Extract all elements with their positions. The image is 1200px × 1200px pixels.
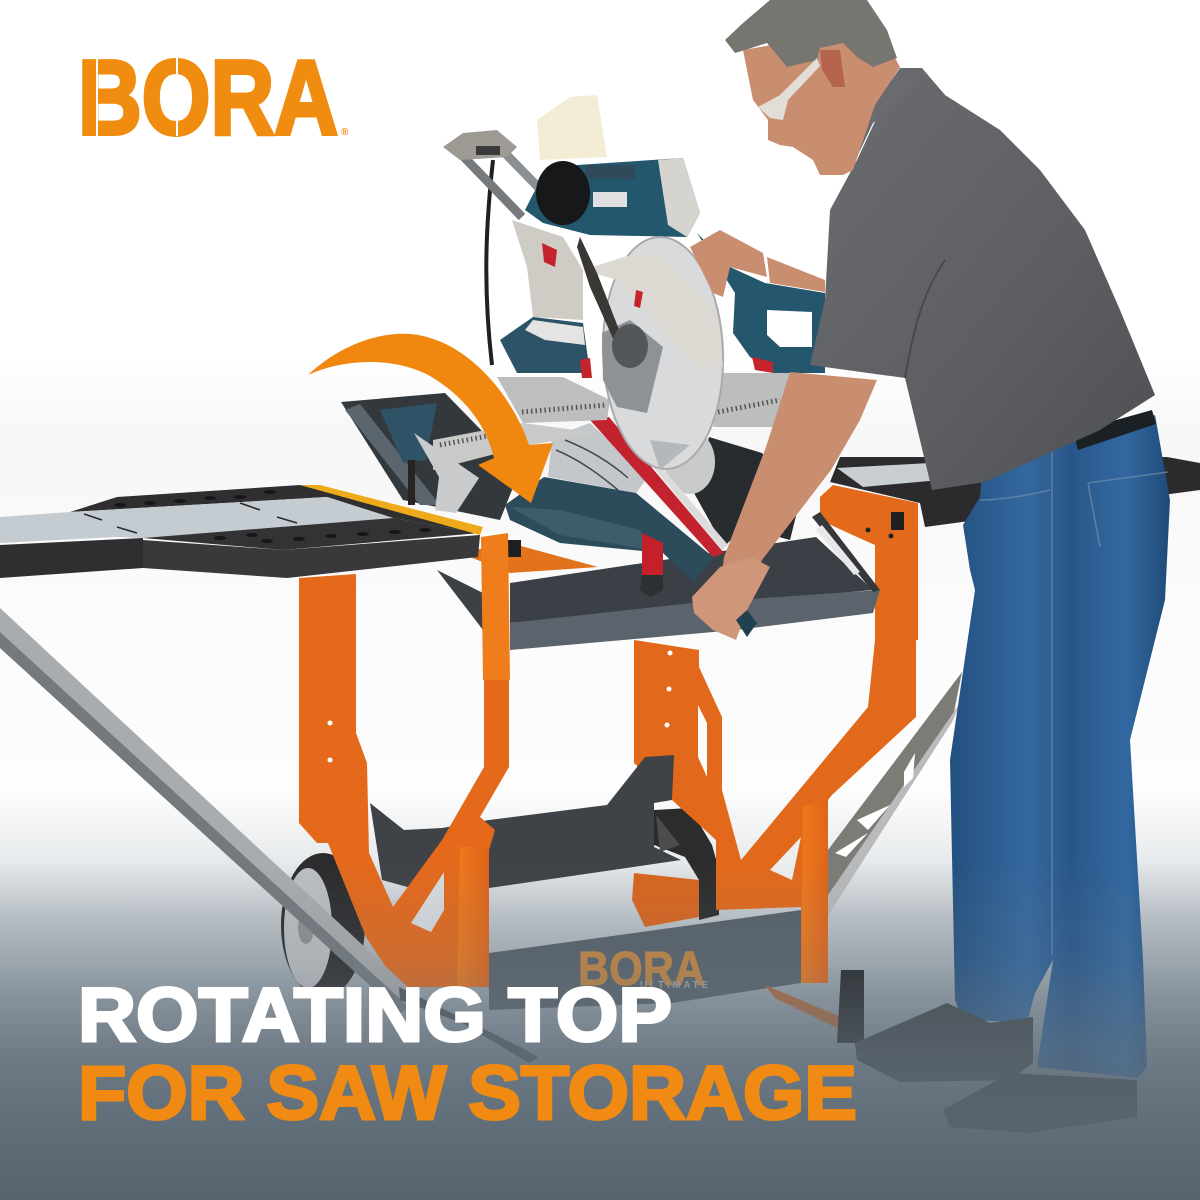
- headline: FOR SAW STORAGE: [78, 1051, 857, 1136]
- front rail with logo: ULTIMATE: [640, 980, 708, 991]
- orange crossmember under saw: [460, 543, 598, 573]
- man: front arm and hand: [692, 372, 877, 640]
- overlay fading the lower scene into the gradient: [0, 860, 1200, 1200]
- headline: [78, 973, 857, 1136]
- man: polo shirt: [810, 68, 1155, 490]
- orange rotation arrow: [308, 334, 553, 503]
- headline: ROTATING TOP: [78, 973, 672, 1058]
- motor housing: [525, 158, 700, 237]
- right table wing: [830, 457, 1200, 527]
- man: head: [725, 0, 900, 175]
- left orange frame: [299, 574, 509, 987]
- front orange post: [481, 533, 510, 680]
- front wheel: [281, 853, 365, 997]
- saw storage tray: [437, 512, 880, 650]
- left table wing: [0, 485, 521, 578]
- man: shoes: [855, 1003, 1137, 1133]
- dust bag: [537, 95, 607, 160]
- logo: BORA: [78, 39, 338, 157]
- tilting top bracket: [341, 393, 520, 520]
- man: jeans: [950, 410, 1170, 1078]
- logo: ®: [341, 127, 349, 138]
- lower storage shelf: [370, 755, 681, 897]
- miter saw base: [505, 417, 800, 597]
- rear wheel and hub: [632, 808, 719, 927]
- man: rear forearm and hand: [690, 230, 825, 297]
- right orange frame: [634, 485, 918, 983]
- front rail with logo: BORA: [578, 943, 705, 996]
- right support strut: [828, 672, 962, 915]
- power cord: [486, 160, 493, 365]
- handle trigger: [752, 357, 773, 373]
- saw blade and guard: [577, 235, 727, 471]
- left support strut: [0, 608, 425, 1013]
- front rail with logo: [489, 910, 801, 1010]
- saw arm castings: [500, 220, 592, 378]
- slide rails: [443, 130, 538, 217]
- D-handle: [697, 233, 825, 373]
- stand feet: [399, 970, 864, 1063]
- fence rulers: [433, 373, 797, 470]
